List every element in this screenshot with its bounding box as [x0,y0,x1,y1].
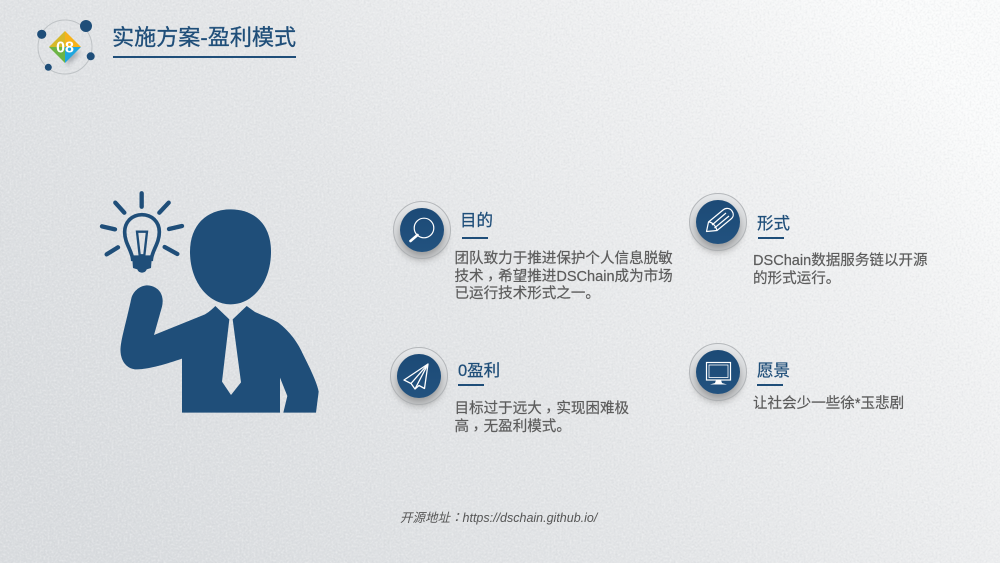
title underline [113,56,296,58]
text: 目的: 团队致力于推进保护个人信息脱敏 [454,251,673,267]
text: 目的 [454,250,673,302]
text: 0盈利: 高 无盈利模式。 [454,418,571,434]
heading: 0盈利: 0盈利 [458,362,500,380]
icon: monitor [689,343,747,406]
section badge: 08 [37,20,95,74]
text: 目的: 技术 希望推进DSChain成为市场 [454,268,673,284]
text: 目的: ， [487,268,502,284]
heading: 目的: 目的 [460,212,493,230]
footer: source address: ： [454,510,466,524]
icon: light bulb [102,193,182,273]
icon: pencil [689,193,747,256]
heading underline: 目的 [462,237,488,239]
text: 0盈利: ， [545,400,560,416]
text: 0盈利: ， [473,418,487,434]
heading underline: 0盈利 [458,384,484,386]
heading underline: 愿景 [757,384,783,386]
title: 实施方案-盈利模式 [112,25,296,50]
icon: magnifier [393,201,451,264]
illustration: businessman with light bulb [100,191,319,413]
text: 0盈利: 目标过于远大 实现困难极 [454,401,629,417]
text: 形式: DSChain数据服务链以开源 [753,253,928,269]
heading: 形式: 形式 [757,215,790,233]
section badge: 08: 08 [56,40,74,56]
text: 愿景: 让社会少一些徐*玉悲剧 [753,396,904,412]
text: 形式: 的形式运行。 [753,271,840,287]
person head [190,209,271,304]
heading: 愿景: 愿景 [757,362,790,380]
text: 形式 [753,252,928,287]
text: 目的: 已运行技术形式之一。 [454,286,600,302]
person body [120,285,319,413]
footer: source address: 开源地址 https://dschain.github.io/ [400,511,597,525]
icon: paper plane [390,347,448,410]
heading underline: 形式 [758,237,784,239]
text: 0盈利 [454,400,629,434]
